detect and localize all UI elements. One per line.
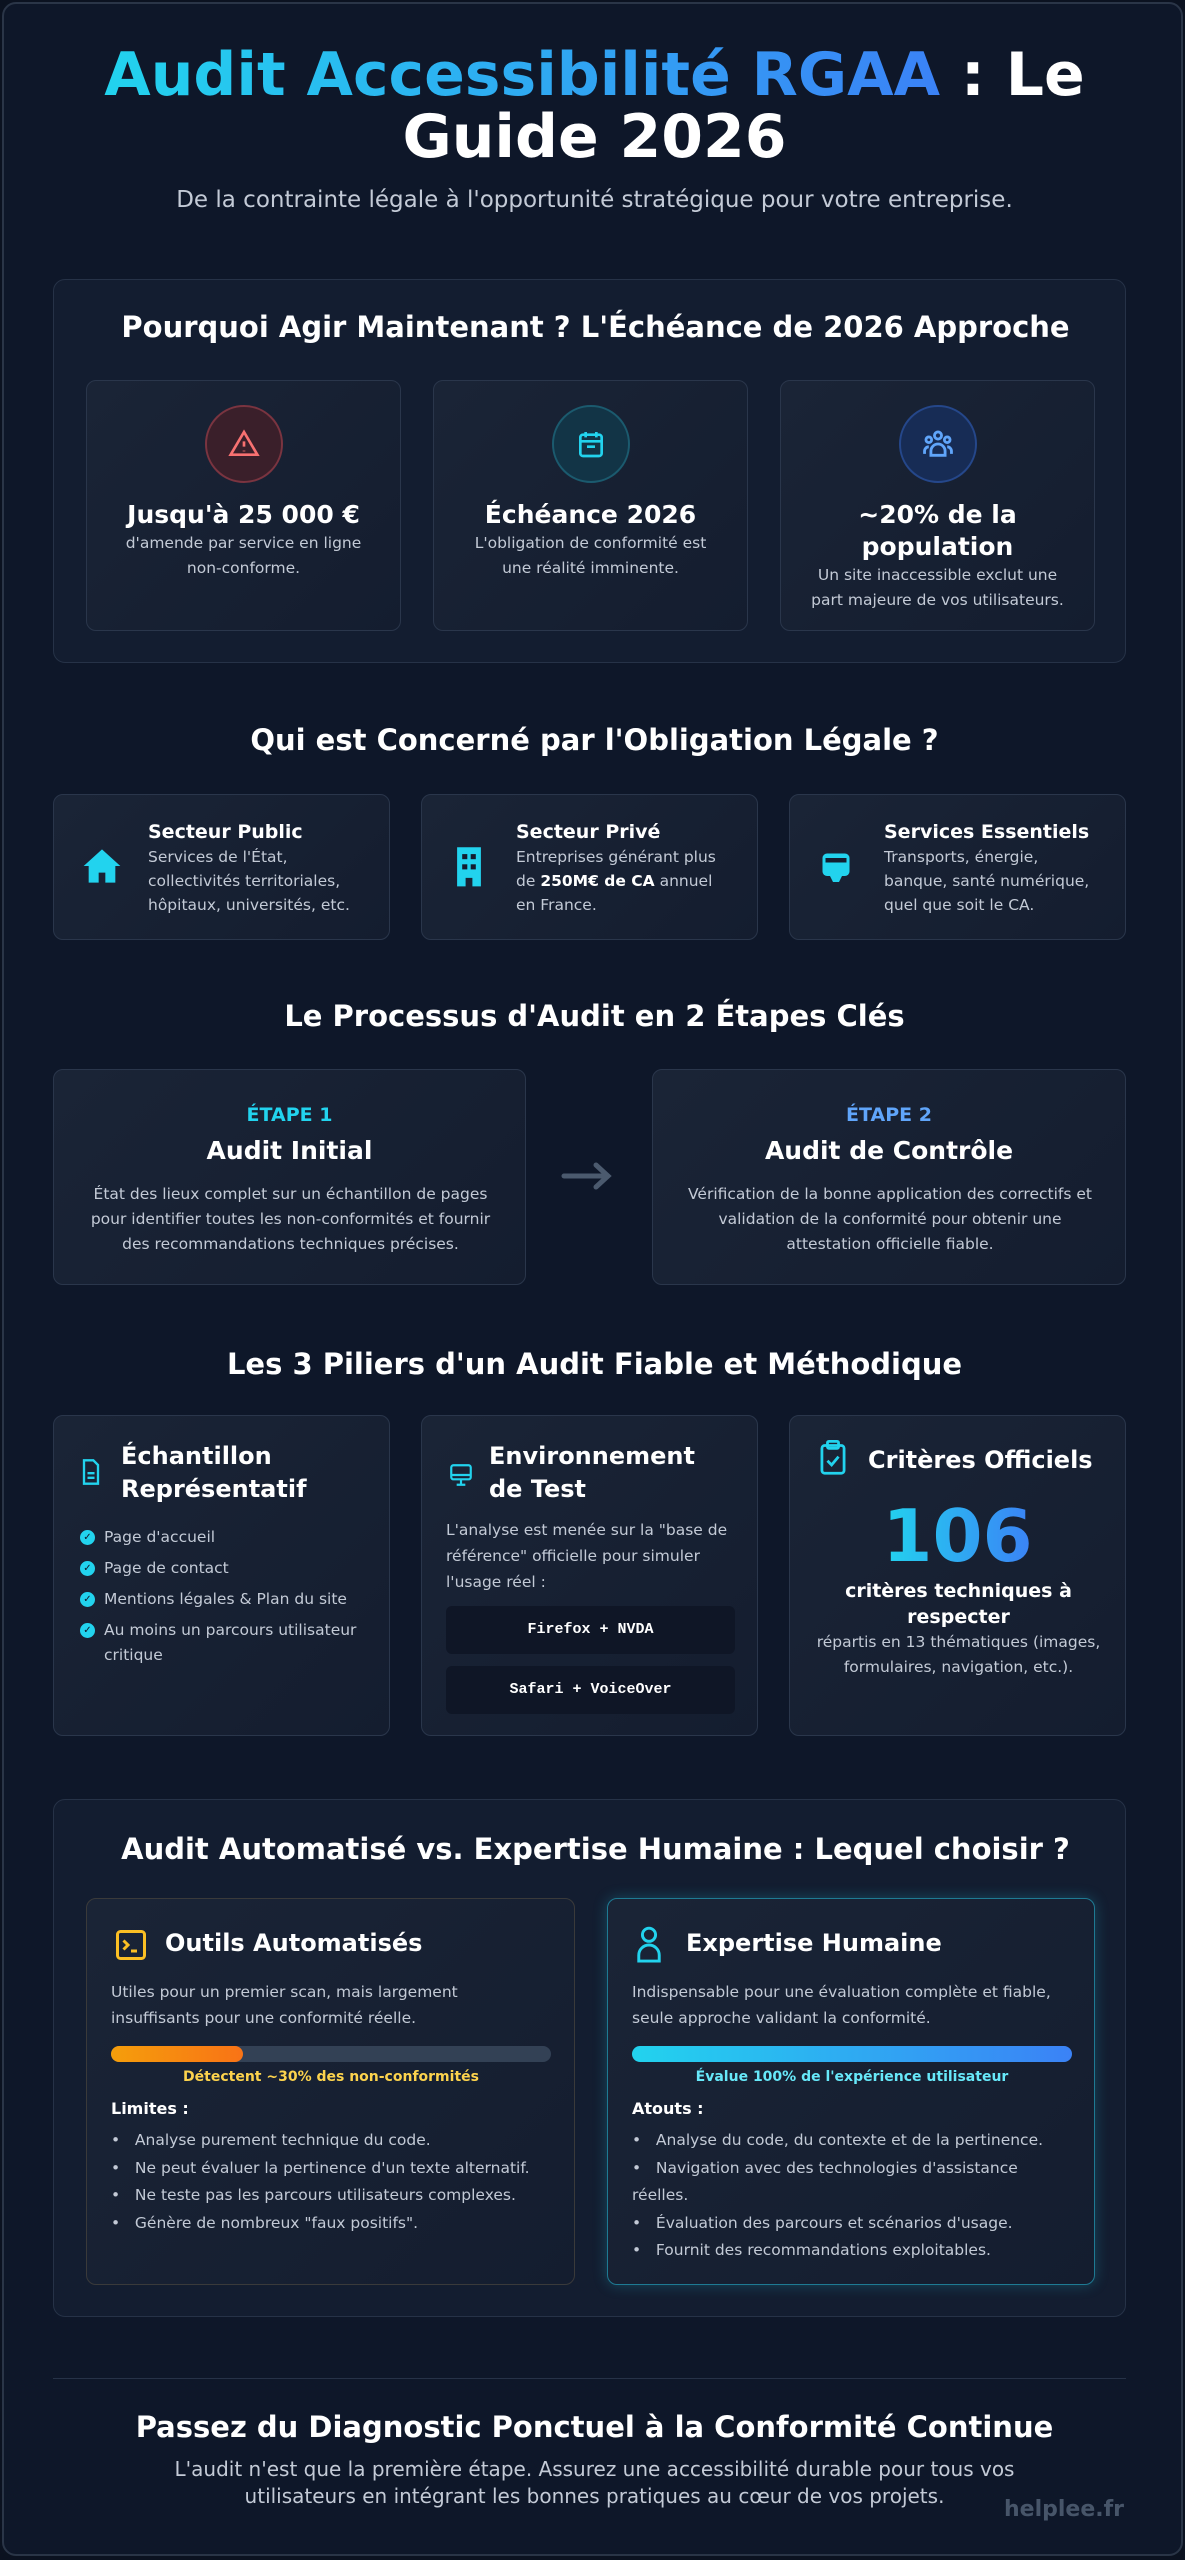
card: echantillon: [53, 1415, 390, 1736]
icon: clipboard: [820, 1440, 846, 1475]
card: etape 2: [652, 1069, 1126, 1285]
card: expertise humaine: Atouts :: [632, 2099, 704, 2118]
card: outils automatises: Détectent ~30% des non-conformités: [183, 2069, 479, 2085]
card: etape 2: Vérification de la bonne application des correctifs et validation de la conformité pour obtenir une attestation officielle fiable.: [688, 1185, 1092, 1253]
card: secteur prive: Entreprises générant plus: [516, 848, 716, 866]
card: expertise humaine: • Évaluation des parcours et scénarios d'usage.: [632, 2214, 1013, 2232]
card: outils automatises: [86, 1898, 575, 2285]
card: amende: Jusqu'à 25 000 €: [127, 500, 360, 529]
card: expertise humaine: Évalue 100% de l'expérience utilisateur: [696, 2069, 1008, 2085]
card: echeance: L'obligation de conformité est une réalité imminente.: [475, 534, 706, 577]
card: criteres: critères techniques à respecter: [845, 1580, 1072, 1628]
card: etape 1: ÉTAPE 1: [247, 1104, 332, 1126]
card: outils automatises: • Ne teste pas les parcours utilisateurs complexes.: [111, 2186, 516, 2204]
card: population: population: [862, 532, 1013, 561]
card: echantillon: ✓: [83, 1563, 92, 1574]
card: outils automatises: • Génère de nombreux "faux positifs".: [111, 2214, 418, 2232]
card: criteres: 106: [882, 1494, 1033, 1578]
card: outils automatises: • Ne peut évaluer la pertinence d'un texte alternatif.: [111, 2158, 530, 2176]
heading: Audit Automatisé vs. Expertise Humaine : Lequel choisir ?: [121, 1832, 1070, 1866]
panel: auto vs humain: [53, 1799, 1126, 2317]
card: expertise humaine: [607, 1898, 1095, 2285]
icon: warning: [204, 405, 282, 483]
card: environnement: Firefox + NVDA: [527, 1621, 654, 1638]
card: population: ~20% de la: [858, 500, 1017, 529]
card: environnement: L'analyse est menée sur la "base de référence" officielle pour simuler l'usage réel :: [446, 1521, 727, 1591]
card: etape 1: État des lieux complet sur un échantillon de pages pour identifier toutes les non-conformités et fournir des recommandations techniques précises.: [91, 1185, 490, 1253]
card: outils automatises: insuffisants pour une conformité réelle.: [111, 2009, 416, 2027]
card: services essentiels: [789, 794, 1126, 940]
title: Audit Accessibilité RGAA : Le: [104, 40, 1085, 110]
card: expertise humaine: • Fournit des recommandations exploitables.: [632, 2241, 991, 2259]
card: echantillon: Échantillon: [121, 1442, 272, 1470]
card: amende: [86, 380, 401, 631]
icon: terminal: [116, 1930, 146, 1960]
card: echantillon: Représentatif: [121, 1475, 307, 1503]
heading: piliers: Les 3 Piliers d'un Audit Fiable et Méthodique: [227, 1347, 962, 1381]
card: outils automatises: Limites :: [111, 2099, 189, 2118]
footer text: L'audit n'est que la première étape. Assurez une accessibilité durable pour tous vos utilisateurs en intégrant les bonnes pratiques au cœur de vos projets.: [175, 2457, 1014, 2508]
card: environnement: Safari + VoiceOver: [509, 1681, 672, 1698]
card: echeance: Échéance 2026: [485, 500, 696, 529]
card: amende: d'amende par service en ligne non-conforme.: [126, 534, 361, 577]
icon: document: [82, 1459, 100, 1485]
icon: house: [84, 850, 120, 883]
card: secteur prive: de 250M€ de CA annuel en France.: [516, 872, 712, 914]
card: etape 2: ÉTAPE 2: [846, 1104, 932, 1126]
card: secteur public: Services de l'État, collectivités territoriales, hôpitaux, universités, etc.: [148, 848, 350, 914]
card: echantillon: Mentions légales & Plan du site: [104, 1590, 347, 1608]
title: [104, 40, 1085, 172]
card: echeance: [433, 380, 748, 631]
card: environnement: de Test: [489, 1475, 586, 1503]
card: etape 2: Audit de Contrôle: [765, 1136, 1013, 1165]
icon: monitor: [450, 1464, 472, 1486]
panel: pourquoi agir: [53, 279, 1126, 663]
card: echantillon: Au moins un parcours utilisateur critique: [104, 1621, 356, 1664]
icon: calendar: [552, 405, 630, 483]
heading: qui est concerne: Qui est Concerné par l'Obligation Légale ?: [250, 723, 939, 757]
card: population: Un site inaccessible exclut une part majeure de vos utilisateurs.: [811, 566, 1064, 609]
icon: user: [637, 1926, 661, 1962]
card: echantillon: Page d'accueil: [104, 1528, 215, 1546]
card: services essentiels: banque, santé numérique,: [884, 872, 1089, 890]
icon: building: [457, 847, 481, 886]
card: etape 1: [53, 1069, 526, 1285]
card: population: [780, 380, 1095, 631]
card: echantillon: ✓: [83, 1594, 92, 1605]
card: environnement: [421, 1415, 758, 1736]
footer heading: Passez du Diagnostic Ponctuel à la Conformité Continue: [136, 2410, 1053, 2444]
card: outils automatises: • Analyse purement technique du code.: [111, 2131, 431, 2149]
progress bar 30%: [111, 2046, 551, 2062]
card: services essentiels: quel que soit le CA.: [884, 896, 1034, 914]
card: expertise humaine: Indispensable pour une évaluation complète et fiable, seule approche validant la conformité.: [632, 1983, 1051, 2027]
card: echantillon: ✓: [83, 1625, 92, 1636]
card: echantillon: ✓: [83, 1532, 92, 1543]
card: outils automatises: Utiles pour un premier scan, mais largement: [111, 1983, 458, 2001]
card: secteur public: [53, 794, 390, 940]
card: secteur prive: Secteur Privé: [516, 821, 660, 843]
card: expertise humaine: • Analyse du code, du contexte et de la pertinence.: [632, 2131, 1043, 2149]
brand: helplee.fr: [1004, 2497, 1124, 2522]
card: etape 1: Audit Initial: [207, 1136, 372, 1165]
card: secteur prive: [421, 794, 758, 940]
subtitle: De la contrainte légale à l'opportunité stratégique pour votre entreprise.: [176, 187, 1013, 213]
progress bar 100%: [632, 2046, 1072, 2062]
card: criteres: répartis en 13 thématiques (images, formulaires, navigation, etc.).: [817, 1633, 1100, 1676]
card: outils automatises: Outils Automatisés: [165, 1929, 422, 1957]
card: echantillon: Page de contact: [104, 1559, 229, 1577]
card: services essentiels: Services Essentiels: [884, 821, 1089, 843]
card: expertise humaine: Expertise Humaine: [686, 1929, 942, 1957]
icon: train: [822, 854, 850, 882]
card: environnement: Environnement: [489, 1442, 695, 1470]
card: criteres: [789, 1415, 1126, 1736]
heading: processus: Le Processus d'Audit en 2 Étapes Clés: [284, 999, 905, 1033]
icon: users: [898, 405, 976, 483]
arrow: [562, 1162, 612, 1190]
card: criteres: Critères Officiels: [868, 1446, 1093, 1474]
title: Guide 2026: [402, 102, 787, 172]
heading: Pourquoi Agir Maintenant ? L'Échéance de 2026 Approche: [121, 310, 1070, 344]
card: services essentiels: Transports, énergie,: [884, 848, 1038, 866]
card: secteur public: Secteur Public: [148, 821, 303, 843]
card: expertise humaine: • Navigation avec des technologies d'assistance réelles.: [632, 2158, 1018, 2204]
